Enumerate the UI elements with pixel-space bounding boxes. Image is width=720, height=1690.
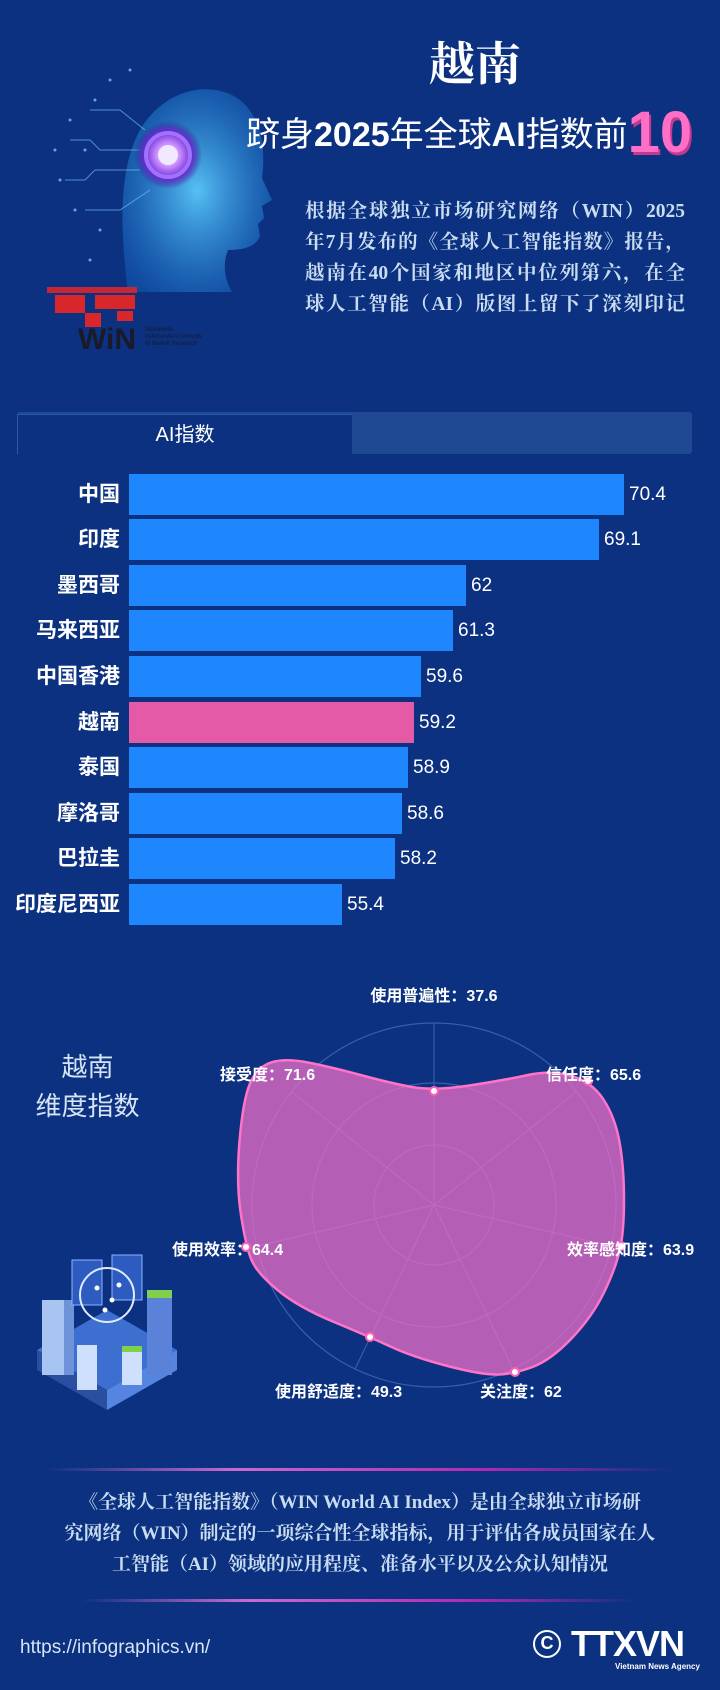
bar chart: AI index: 中国香港: [36, 665, 120, 688]
bar chart: AI index: 55.4: [347, 894, 384, 915]
radar chart: dimensions: 使用普遍性：37.6: [370, 986, 498, 1005]
logo: WIN: Independent Network: [145, 334, 203, 340]
radar chart: dimensions: [172, 986, 694, 1400]
logo: WIN: [47, 287, 203, 355]
bar chart: AI index: 58.6: [407, 803, 444, 824]
footer description: 究网络（WIN）制定的一项综合性全球指标，用于评估各成员国家在人: [64, 1523, 656, 1544]
illustration: AI head: [54, 68, 272, 292]
logo: WIN: of Market Research: [145, 341, 197, 347]
tab header: [17, 412, 692, 454]
bar chart: AI index: 印度: [78, 528, 120, 551]
radar chart: dimensions: 使用效率：64.4: [172, 1240, 283, 1259]
divider top: [45, 1468, 675, 1471]
bar chart: AI index: 马来西亚: [36, 619, 120, 642]
radar heading: [35, 1052, 140, 1121]
radar chart: dimensions: 效率感知度：63.9: [567, 1240, 694, 1259]
bar chart: AI index: 59.6: [426, 666, 463, 687]
logo: TTXVN: C: [540, 1633, 554, 1653]
logo: TTXVN: TTXVN: [571, 1623, 684, 1664]
title: 越南: [429, 39, 521, 90]
intro paragraph: [305, 200, 685, 315]
bar chart: AI index: 印度尼西亚: [15, 893, 120, 916]
radar heading: 维度指数: [35, 1091, 140, 1121]
bar chart: AI index: 58.9: [413, 757, 450, 778]
logo: TTXVN: [533, 1623, 700, 1671]
bar chart: AI index: 泰国: [78, 756, 120, 779]
bar chart: AI index: [15, 474, 666, 925]
bar chart: AI index: 69.1: [604, 529, 641, 550]
logo: WIN: Worldwide: [145, 327, 174, 333]
intro paragraph: 球人工智能（AI）版图上留下了深刻印记: [305, 294, 685, 315]
illustration: smart city: [37, 1254, 177, 1410]
bar chart: AI index: 58.2: [400, 848, 437, 869]
bar chart: AI index: 70.4: [629, 484, 666, 505]
bar chart: AI index: 越南: [78, 711, 120, 734]
footer description: 《全球人工智能指数》（WIN World AI Index）是由全球独立市场研: [79, 1492, 641, 1513]
bar chart: AI index: 62: [471, 575, 492, 596]
logo: TTXVN: Vietnam News Agency: [615, 1662, 700, 1671]
subtitle: 跻身2025年全球AI指数前10: [246, 100, 692, 165]
tab header: AI指数: [156, 424, 214, 446]
source url: https://infographics.vn/: [20, 1637, 210, 1658]
bar chart: AI index: 中国: [78, 483, 120, 506]
bar chart: AI index: 59.2: [419, 712, 456, 733]
footer description: [64, 1492, 656, 1575]
radar chart: dimensions: 接受度：71.6: [220, 1065, 315, 1084]
bar chart: AI index: 巴拉圭: [57, 847, 120, 870]
bar chart: AI index: 摩洛哥: [57, 802, 120, 825]
intro paragraph: 年7月发布的《全球人工智能指数》报告，: [305, 232, 685, 253]
divider bottom: [80, 1599, 640, 1602]
radar chart: dimensions: 信任度：65.6: [546, 1065, 641, 1084]
footer description: 工智能（AI）领域的应用程度、准备水平以及公众认知情况: [112, 1554, 608, 1575]
bar chart: AI index: 墨西哥: [57, 574, 120, 597]
bar chart: AI index: 61.3: [458, 620, 495, 641]
radar heading: 越南: [61, 1052, 114, 1082]
intro paragraph: 根据全球独立市场研究网络（WIN）2025: [305, 201, 685, 222]
intro paragraph: 越南在40个国家和地区中位列第六，在全: [305, 263, 685, 284]
